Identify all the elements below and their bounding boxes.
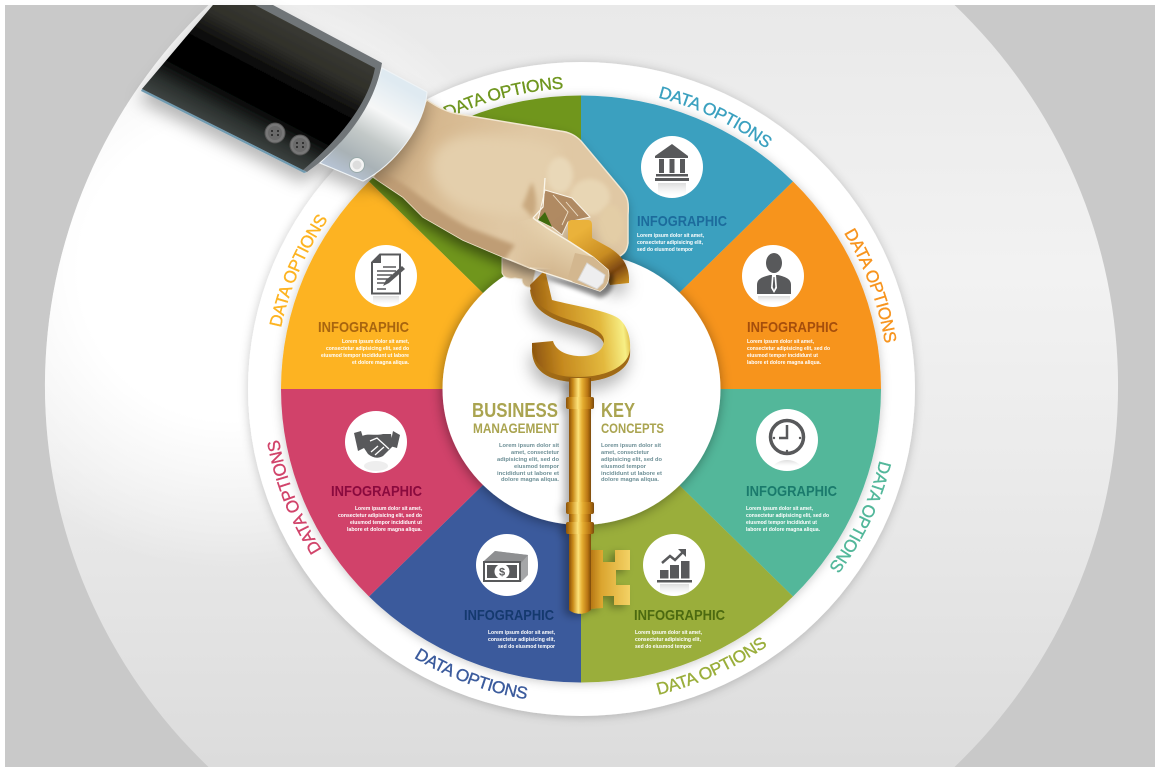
jacket outer edge xyxy=(142,5,382,172)
body text: consectetur adipisicing elit, sed do xyxy=(326,346,410,352)
body text xyxy=(635,630,702,650)
icon: growth chart xyxy=(643,534,705,596)
block: teal segment xyxy=(746,409,837,533)
back-of-hand highlight xyxy=(428,134,526,211)
body text xyxy=(637,233,704,253)
body text: consectetur adipisicing elit, sed do xyxy=(338,513,423,519)
segment: yellow xyxy=(281,182,581,389)
body text: sed do eiusmod tempor xyxy=(637,247,694,253)
body text: eiusmod tempor xyxy=(601,464,647,470)
body text: dolore magna aliqua. xyxy=(601,477,659,483)
body text: labore et dolore magna aliqua. xyxy=(747,360,821,366)
body text: amet, consectetur xyxy=(511,450,560,456)
body text: Lorem ipsum dolor sit amet, xyxy=(488,630,555,636)
label: blue: DATA OPTIONS xyxy=(659,86,772,148)
suit sleeve with cuff xyxy=(141,5,427,181)
centre white circle xyxy=(442,253,720,525)
S body xyxy=(530,270,630,377)
sleeve blue edge xyxy=(141,89,307,173)
block: orange segment xyxy=(742,245,838,366)
segment: teal xyxy=(581,389,881,596)
curved data option labels xyxy=(224,50,896,699)
thumb joint xyxy=(568,253,609,291)
ring top xyxy=(566,397,594,409)
body text: amet, consectetur xyxy=(601,450,650,456)
block: olive segment xyxy=(634,534,725,650)
label: pink: DATA OPTIONS xyxy=(268,440,322,555)
body text xyxy=(497,443,560,483)
icon: businessman xyxy=(742,245,804,307)
icon: money stack: $ xyxy=(499,566,505,578)
body text: consectetur adipisicing elit, xyxy=(635,637,701,643)
body text: consectetur adipisicing elit, xyxy=(488,637,555,643)
thenar crease xyxy=(533,178,545,218)
body text xyxy=(601,443,663,483)
segment: green xyxy=(369,96,581,389)
key shaft xyxy=(566,378,630,614)
label: yellow: DATA OPTIONS xyxy=(269,214,326,327)
heading: management: MANAGEMENT xyxy=(473,420,559,436)
body text xyxy=(338,506,423,533)
heading: key: KEY xyxy=(601,400,636,422)
heading: INFOGRAPHIC xyxy=(634,607,725,624)
segment: navy xyxy=(369,389,581,682)
body text: labore et dolore magna aliqua. xyxy=(347,527,422,533)
body text xyxy=(746,506,830,533)
body text: adipisicing elit, sed do xyxy=(601,457,663,463)
body text: sed do eiusmod tempor xyxy=(498,644,556,650)
body text: Lorem ipsum dolor sit xyxy=(601,443,661,449)
label: orange: DATA OPTIONS xyxy=(844,228,896,343)
body text: dolore magna aliqua. xyxy=(501,477,559,483)
body text: adipisicing elit, sed do xyxy=(497,457,560,463)
gap showing green xyxy=(538,212,552,227)
body text: Lorem ipsum dolor sit amet, xyxy=(635,630,702,636)
thenar fold shadow xyxy=(522,182,536,218)
finger creases xyxy=(553,195,578,225)
button 2 xyxy=(290,135,310,155)
body text: Lorem ipsum dolor sit amet, xyxy=(637,233,704,239)
heading: business: BUSINESS xyxy=(472,400,558,422)
segment: pink xyxy=(281,389,581,596)
ring middle xyxy=(566,502,594,514)
underside shadow xyxy=(370,175,515,262)
shaft xyxy=(569,378,591,614)
dollar sign head of key xyxy=(530,220,630,382)
body text: eiusmod tempor xyxy=(514,464,560,470)
centre text left xyxy=(472,400,560,483)
segment: olive xyxy=(581,389,793,682)
heading: INFOGRAPHIC xyxy=(637,213,727,230)
soft hand shading xyxy=(370,135,623,262)
body text: eiusmod tempor incididunt ut xyxy=(746,520,817,526)
body text: consectetur adipisicing elit, xyxy=(637,240,703,246)
segment: blue xyxy=(581,96,793,389)
outer white ring xyxy=(248,62,915,716)
button 1 xyxy=(265,123,285,143)
key teeth xyxy=(589,550,630,609)
block: navy segment xyxy=(464,534,556,650)
icon: bank xyxy=(641,136,703,198)
thumb xyxy=(516,218,610,292)
icon: clock xyxy=(756,409,818,471)
heading: INFOGRAPHIC xyxy=(747,319,838,336)
wheel segments xyxy=(281,96,881,682)
S top band xyxy=(568,220,629,285)
body text xyxy=(488,630,556,650)
label: teal: DATA OPTIONS xyxy=(830,462,892,572)
hand palm and fingers xyxy=(370,100,628,270)
cuff button xyxy=(350,158,364,172)
body text: eiusmod tempor incididunt ut xyxy=(747,353,818,359)
knuckle: third xyxy=(599,205,623,245)
body text xyxy=(747,339,831,366)
body text: consectetur adipisicing elit, sed do xyxy=(747,346,831,352)
heading: INFOGRAPHIC xyxy=(746,483,837,500)
finger crevice xyxy=(538,190,590,235)
knuckle: second xyxy=(570,179,610,215)
shirt cuff xyxy=(320,68,427,181)
ring lower xyxy=(566,522,594,534)
body text: incididunt ut labore et xyxy=(601,471,662,477)
body text: Lorem ipsum dolor sit amet, xyxy=(747,339,814,345)
body text xyxy=(321,339,410,366)
label: olive: DATA OPTIONS xyxy=(656,638,766,695)
centre text right xyxy=(601,400,664,483)
icon: handshake xyxy=(345,411,407,473)
body text: Lorem ipsum dolor sit amet, xyxy=(746,506,813,512)
body text: labore et dolore magna aliqua. xyxy=(746,527,820,533)
thumb nail xyxy=(578,263,605,289)
block: blue segment xyxy=(637,136,727,253)
body text: eiusmod tempor incididunt ut labore xyxy=(321,353,409,359)
body text: incididunt ut labore et xyxy=(497,471,559,477)
knuckle: first xyxy=(547,157,573,193)
body text: Lorem ipsum dolor sit amet, xyxy=(355,506,422,512)
label: navy: DATA OPTIONS xyxy=(414,648,528,699)
body text: Lorem ipsum dolor sit xyxy=(499,443,559,449)
thumb base blending into palm xyxy=(516,228,592,281)
body text: sed do eiusmod tempor xyxy=(635,644,693,650)
heading: INFOGRAPHIC xyxy=(318,319,409,336)
body text: Lorem ipsum dolor sit amet, xyxy=(342,339,409,345)
thumb outline xyxy=(530,218,609,291)
body text: et dolore magna aliqua. xyxy=(352,360,409,366)
segment: orange xyxy=(581,182,881,389)
body text: consectetur adipisicing elit, sed do xyxy=(746,513,830,519)
block: pink segment xyxy=(331,411,423,533)
block: yellow segment xyxy=(318,245,417,366)
heading: concepts: CONCEPTS xyxy=(601,420,664,436)
thumb cast shadow xyxy=(540,272,614,298)
jacket main xyxy=(142,5,375,170)
label: green: DATA OPTIONS xyxy=(443,76,563,114)
heading: INFOGRAPHIC xyxy=(331,483,422,500)
lower curled fingers xyxy=(502,258,536,287)
S lower extrusion xyxy=(530,275,630,382)
body text: eiusmod tempor incididunt ut xyxy=(350,520,422,526)
icon: document and pen xyxy=(355,245,417,307)
heading: INFOGRAPHIC xyxy=(464,607,554,624)
